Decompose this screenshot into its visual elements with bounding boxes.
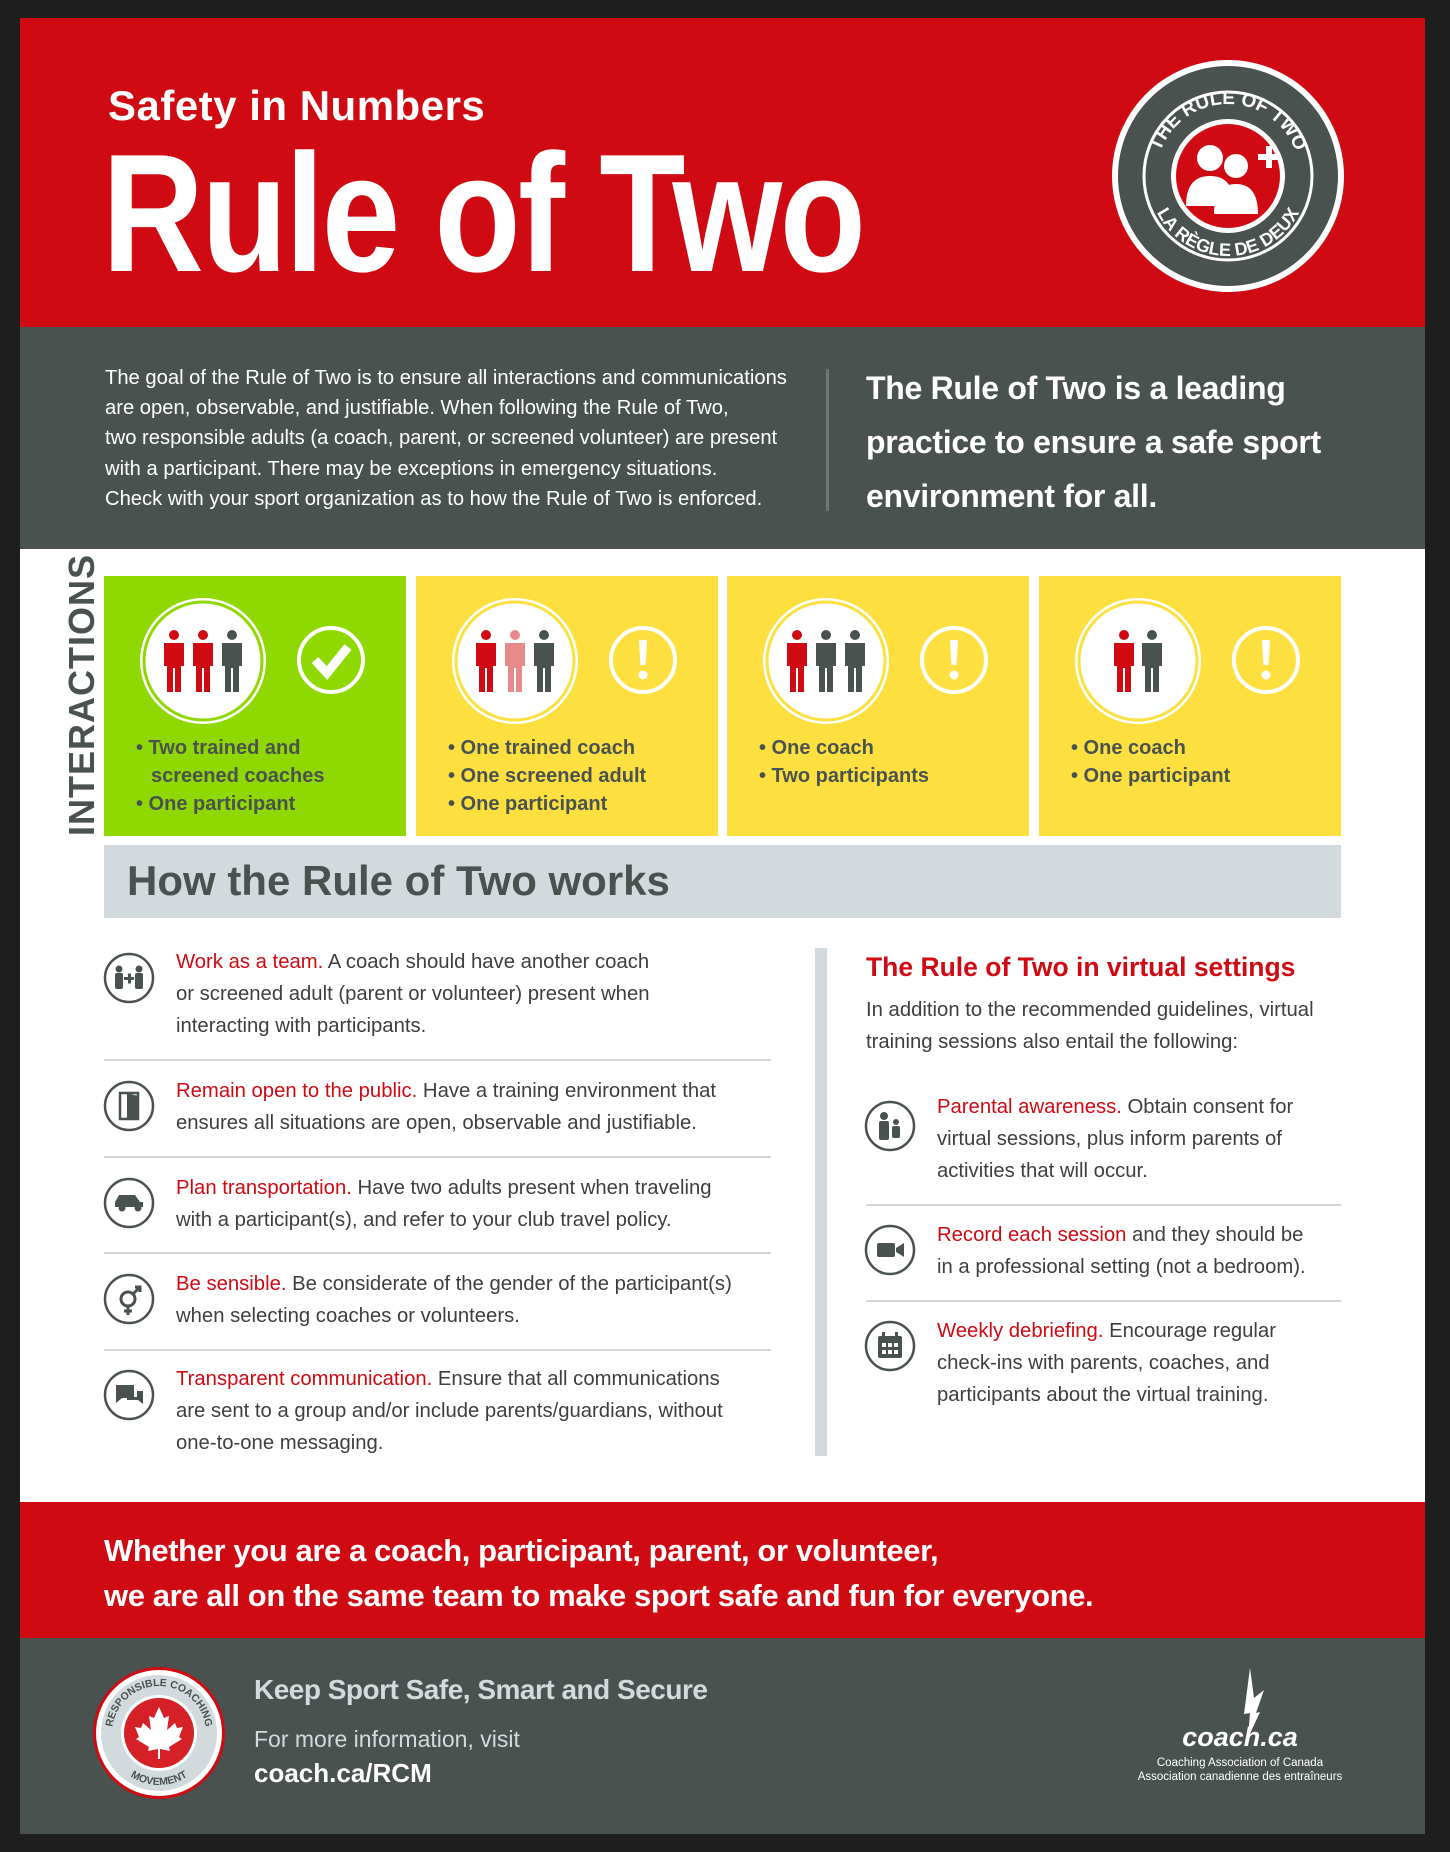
logo: responsible coaching movement: RESPONSIBLE COACHING [105, 1678, 212, 1726]
icon: warning [609, 626, 677, 694]
logo: coach.ca: Coaching Association of Canada [1157, 1757, 1323, 1769]
item: be sensible: when selecting coaches or volunteers. [176, 1305, 520, 1327]
item: remain open: Remain open to the public. Have a training environment that [176, 1080, 716, 1102]
icon: warning [1232, 626, 1300, 694]
intro [866, 999, 1314, 1053]
bullets: • Two trained and [136, 737, 300, 759]
bullets [759, 737, 929, 787]
item: work as a team: Work as a team. A coach should have another coach [176, 951, 649, 973]
intro paragraph [105, 367, 787, 510]
left list [104, 951, 771, 1454]
logo: rule of two badge: LA RÈGLE DE DEUX [1157, 206, 1300, 256]
red banner message: we are all on the same team to make sport safe and fun for everyone. [104, 1578, 1093, 1613]
icon: three people [140, 598, 266, 724]
title: Rule of Two [102, 119, 863, 307]
intro paragraph: Check with your sport organization as to how the Rule of Two is enforced. [105, 488, 762, 510]
heading: The Rule of Two in virtual settings [866, 952, 1295, 982]
logo: responsible coaching movement: MOVEMENT [130, 1770, 186, 1786]
header: red band [20, 18, 1425, 327]
bullets: • Two participants [759, 765, 929, 787]
item: work as a team: or screened adult (parent or volunteer) present when [176, 983, 650, 1005]
virtual item: parental awareness [864, 1096, 1293, 1182]
virtual item: parental awareness: Parental awareness. Obtain consent for [937, 1096, 1293, 1118]
icon: coach and two participants [763, 598, 889, 724]
icon: warning [920, 626, 988, 694]
key statement: environment for all. [866, 478, 1157, 514]
logo: rule of two badge [1112, 60, 1344, 292]
item: transportation: Plan transportation. Have two adults present when traveling [176, 1177, 712, 1199]
bullets: screened coaches [151, 765, 324, 787]
virtual item: parental awareness: activities that will occur. [937, 1160, 1148, 1182]
footer [20, 1638, 1425, 1834]
intro paragraph: two responsible adults (a coach, parent, or screened volunteer) are present [105, 427, 777, 449]
virtual item: weekly debriefing: check-ins with parents, coaches, and [937, 1352, 1270, 1374]
white content area [20, 549, 1425, 1502]
key statement: practice to ensure a safe sport [866, 424, 1321, 460]
subtitle: Safety in Numbers [108, 82, 485, 129]
virtual item: record [864, 1224, 1306, 1278]
bullets: • One screened adult [448, 765, 646, 787]
section heading bar [104, 845, 1341, 918]
item: remain open: ensures all situations are open, observable and justifiable. [176, 1112, 697, 1134]
item: transparent communication: are sent to a group and/or include parents/guardians, without [176, 1400, 723, 1422]
item: remain open [104, 1080, 716, 1134]
virtual item: record: Record each session and they should be [937, 1224, 1303, 1246]
icon: check [297, 626, 365, 694]
logo: coach.ca: coach.ca [1182, 1722, 1298, 1752]
intro paragraph: The goal of the Rule of Two is to ensure all interactions and communications [105, 367, 787, 389]
bullets: • One trained coach [448, 737, 635, 759]
intro: In addition to the recommended guidelines, virtual [866, 999, 1314, 1021]
item: work as a team [104, 951, 650, 1037]
bullets: • One coach [759, 737, 874, 759]
item: work as a team: interacting with participants. [176, 1015, 426, 1037]
key statement [866, 370, 1321, 514]
vertical divider [815, 948, 827, 1456]
intro paragraph: with a participant. There may be exceptions in emergency situations. [105, 458, 717, 480]
bullets [136, 737, 324, 815]
vertical label: interactions: INTERACTIONS [61, 554, 102, 836]
icon: coach, adult, participant [452, 598, 578, 724]
item: transportation [104, 1177, 712, 1231]
virtual item: weekly debriefing [864, 1320, 1276, 1406]
item: be sensible: Be sensible. Be considerate of the gender of the participant(s) [176, 1273, 732, 1295]
footer: For more information, visit [254, 1726, 520, 1752]
red banner message: Whether you are a coach, participant, parent, or volunteer, [104, 1533, 938, 1568]
item: transportation: with a participant(s), and refer to your club travel policy. [176, 1209, 672, 1231]
icon: coach and participant [1075, 598, 1201, 724]
bullets [448, 737, 646, 815]
item: transparent communication [104, 1368, 723, 1454]
footer: coach.ca/RCM [254, 1758, 432, 1788]
logo: rule of two badge: THE RULE OF TWO [1148, 94, 1306, 149]
intro band [20, 327, 1425, 549]
bullets: • One participant [136, 793, 295, 815]
card 1 green [104, 576, 406, 836]
logo: coach.ca [1138, 1668, 1342, 1783]
bullets [1071, 737, 1230, 787]
virtual item: parental awareness: virtual sessions, plus inform parents of [937, 1128, 1282, 1150]
virtual item: weekly debriefing: Weekly debriefing. Encourage regular [937, 1320, 1276, 1342]
key statement: The Rule of Two is a leading [866, 370, 1286, 406]
item: transparent communication: Transparent communication. Ensure that all communications [176, 1368, 720, 1390]
logo: responsible coaching movement [93, 1667, 225, 1799]
intro: training sessions also entail the following: [866, 1031, 1238, 1053]
card 2 [416, 576, 718, 836]
bullets: • One coach [1071, 737, 1186, 759]
bullets: • One participant [448, 793, 607, 815]
logo: coach.ca: Association canadienne des entraîneurs [1138, 1771, 1342, 1783]
card 4 [1039, 576, 1341, 836]
red banner message [20, 1502, 1425, 1638]
intro paragraph: are open, observable, and justifiable. When following the Rule of Two, [105, 397, 729, 419]
right column: virtual settings [866, 952, 1314, 1053]
virtual item: record: in a professional setting (not a bedroom). [937, 1256, 1306, 1278]
item: be sensible [104, 1273, 732, 1327]
bullets: • One participant [1071, 765, 1230, 787]
footer text: Keep Sport Safe, Smart and Secure [254, 1674, 707, 1705]
section heading bar: How the Rule of Two works [127, 857, 670, 904]
card 3 [727, 576, 1029, 836]
item: transparent communication: one-to-one messaging. [176, 1432, 383, 1454]
virtual item: weekly debriefing: participants about the virtual training. [937, 1384, 1268, 1406]
